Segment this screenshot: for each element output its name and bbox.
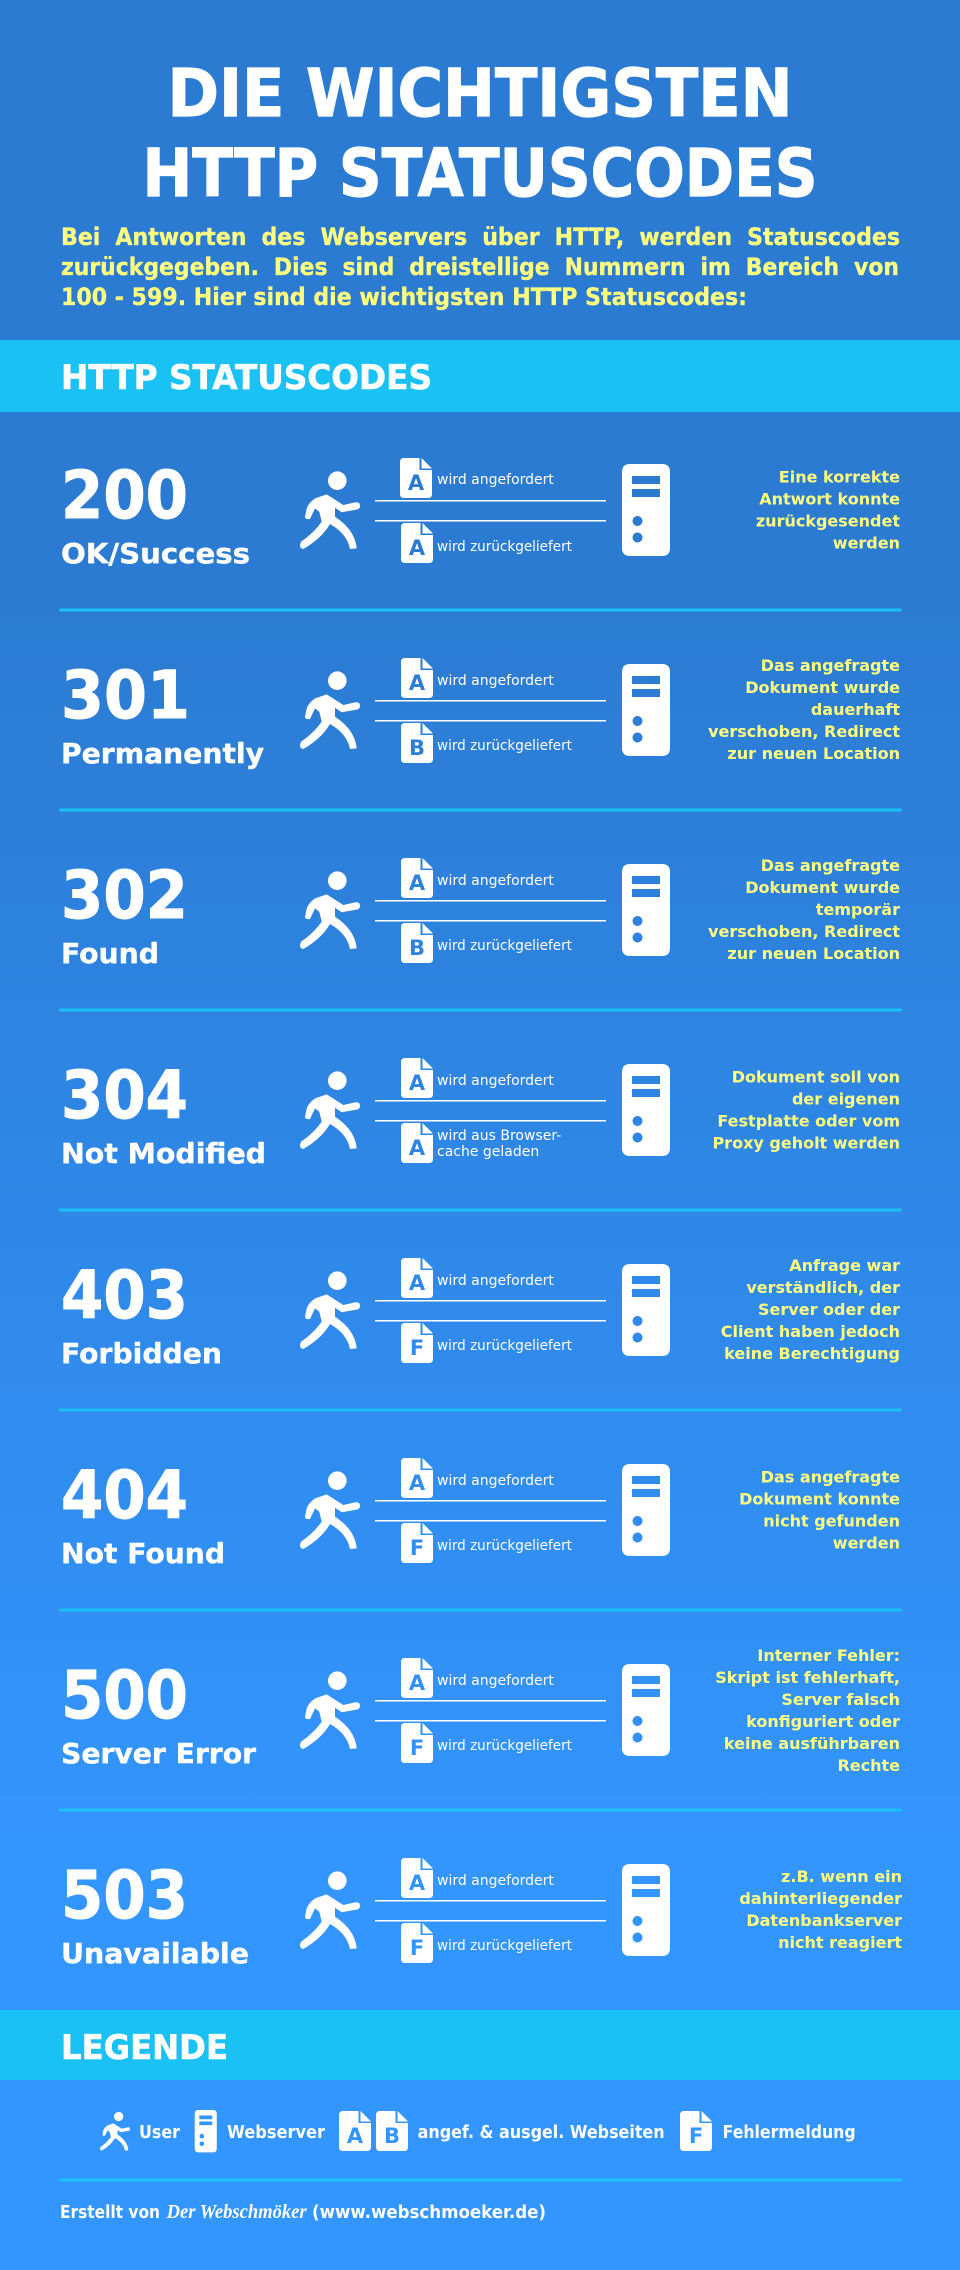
description: Das angefragte [761, 1468, 900, 1486]
request doc: A [409, 871, 426, 895]
description: Interner Fehler: [757, 1646, 900, 1665]
description [756, 468, 900, 552]
response doc [401, 923, 433, 963]
request doc [401, 658, 433, 698]
request doc [401, 1858, 433, 1898]
code number: 200 [61, 457, 188, 534]
status name: Unavailable [61, 1937, 249, 1970]
response label: cache geladen [437, 1144, 539, 1160]
icon: doc B: B [384, 2124, 400, 2148]
response label: wird zurückgeliefert [437, 1338, 572, 1354]
status row: 404 [61, 1457, 900, 1570]
response doc [401, 1923, 433, 1963]
status name: Forbidden [61, 1337, 222, 1370]
icon: user [300, 1071, 360, 1149]
description: zur neuen Location [727, 944, 900, 963]
request label: wird angefordert [437, 1673, 554, 1689]
code number: 304 [61, 1057, 188, 1134]
icon: server [622, 1064, 670, 1156]
legend label: webserver: Webserver [227, 2122, 325, 2143]
description: werden [833, 1534, 900, 1552]
description: der eigenen [792, 1090, 900, 1108]
legend label: user: User [139, 2122, 180, 2143]
response doc: F [410, 1336, 424, 1360]
icon: user [300, 1471, 360, 1549]
icon: user [300, 471, 360, 549]
status row: 302 [61, 856, 900, 970]
request doc [401, 1058, 433, 1098]
description: verschoben, Redirect [708, 922, 900, 941]
description: Anfrage war [789, 1256, 900, 1275]
status row: 503 [61, 1857, 902, 1970]
request label: wird angefordert [437, 1273, 554, 1289]
request doc [400, 458, 432, 498]
request label: wird angefordert [437, 472, 554, 488]
response doc: B [409, 736, 425, 760]
request label: wird angefordert [437, 1073, 554, 1089]
request line [375, 700, 606, 702]
request doc: A [409, 1271, 426, 1295]
description: Antwort konnte [759, 490, 900, 508]
description: Rechte [837, 1756, 900, 1775]
description: Das angefragte [761, 656, 900, 675]
description [708, 856, 900, 963]
description: Server oder der [758, 1300, 900, 1319]
section band: HTTP Statuscodes [0, 340, 960, 412]
section band: Legende: LEGENDE [61, 2028, 228, 2068]
response line [375, 1920, 606, 1922]
icon: server [622, 1264, 670, 1356]
response line [375, 520, 606, 522]
response line [375, 1320, 606, 1322]
legend [100, 2110, 856, 2152]
icon: user [300, 871, 360, 949]
credits: Erstellt von [60, 2202, 160, 2223]
description: Das angefragte [761, 856, 900, 875]
credits [60, 2201, 546, 2223]
icon: doc B [376, 2111, 408, 2151]
response label: wird zurückgeliefert [437, 1538, 572, 1554]
description: Proxy geholt werden [712, 1134, 900, 1152]
icon: doc A: A [347, 2124, 364, 2148]
description [708, 656, 900, 763]
request doc: A [409, 1671, 426, 1695]
description [712, 1068, 900, 1152]
icon: server [622, 664, 670, 756]
response label: wird aus Browser- [437, 1128, 561, 1144]
status row: 200 [61, 457, 900, 570]
intro text: 100 - 599. Hier sind die wichtigsten HTTP Statuscodes: [61, 283, 747, 311]
description: nicht reagiert [778, 1933, 902, 1952]
status name: OK/Success [61, 537, 250, 570]
intro text: zurückgegeben. Dies sind dreistellige Nummern im Bereich von [61, 253, 899, 281]
description: Festplatte oder vom [717, 1112, 900, 1130]
response doc: A [409, 1136, 426, 1160]
icon: server [622, 1664, 670, 1756]
response line [375, 1520, 606, 1522]
response doc [401, 523, 433, 563]
status name: Not Found [61, 1537, 225, 1570]
description: Dokument soll von [732, 1068, 900, 1086]
request line [375, 900, 606, 902]
response doc: F [410, 1536, 424, 1560]
response doc: F [410, 1736, 424, 1760]
response doc: A [409, 536, 426, 560]
icon: server [622, 464, 670, 556]
legend label: pages: angef. & ausgel. Webseiten [418, 2122, 665, 2143]
description: z.B. wenn ein [781, 1867, 902, 1886]
title: HTTP STATUSCODES [142, 135, 818, 212]
status row: 500 [61, 1646, 900, 1775]
icon: doc A [339, 2111, 371, 2151]
description [721, 1256, 900, 1363]
icon: server [622, 1864, 670, 1956]
description: Datenbankserver [746, 1911, 902, 1930]
description: Skript ist fehlerhaft, [715, 1668, 900, 1687]
description: dahinterliegender [739, 1889, 902, 1908]
response doc [401, 1323, 433, 1363]
request doc [401, 1258, 433, 1298]
icon: user [300, 1871, 360, 1949]
title [142, 55, 818, 212]
code number: 302 [61, 857, 188, 934]
response label: wird zurückgeliefert [437, 1938, 572, 1954]
status row: 304 [61, 1057, 900, 1170]
response line [375, 1120, 606, 1122]
request label: wird angefordert [437, 673, 554, 689]
description: konfiguriert oder [746, 1712, 900, 1731]
credits: (www.webschmoeker.de) [312, 2202, 546, 2223]
description: dauerhaft [811, 700, 900, 719]
response doc [401, 1123, 433, 1163]
description: keine Berechtigung [724, 1344, 900, 1363]
request doc: A [409, 1871, 426, 1895]
request label: wird angefordert [437, 873, 554, 889]
response doc [401, 1523, 433, 1563]
response label: wird zurückgeliefert [437, 539, 572, 555]
icon: user [300, 1671, 360, 1749]
description: verschoben, Redirect [708, 722, 900, 741]
request doc: A [409, 1471, 426, 1495]
intro text: Bei Antworten des Webservers über HTTP, werden Statuscodes [61, 223, 900, 251]
request line [375, 1500, 606, 1502]
status name: Found [61, 937, 159, 970]
description: verständlich, der [746, 1278, 900, 1297]
icon: user [100, 2112, 130, 2151]
icon: server [622, 1464, 670, 1556]
request label: wird angefordert [437, 1473, 554, 1489]
request doc: A [408, 471, 425, 495]
request doc: A [409, 1071, 426, 1095]
request doc [401, 1658, 433, 1698]
response line [375, 1720, 606, 1722]
icon: doc F [680, 2111, 712, 2151]
request doc: A [409, 671, 426, 695]
response line [375, 920, 606, 922]
status name: Permanently [61, 737, 264, 770]
code number: 500 [61, 1657, 188, 1734]
description: werden [833, 534, 900, 552]
icon: doc F: F [689, 2124, 703, 2148]
credits: Der Webschmöker [166, 2201, 307, 2223]
request line [375, 1300, 606, 1302]
section band: Legende [0, 2010, 960, 2080]
description: Dokument wurde [745, 678, 900, 697]
description [739, 1867, 902, 1952]
code number: 404 [61, 1457, 188, 1534]
icon: user [300, 671, 360, 749]
description: Dokument konnte [739, 1490, 900, 1508]
title: DIE WICHTIGSTEN [168, 55, 792, 132]
description: Dokument wurde [745, 878, 900, 897]
status name: Server Error [61, 1737, 256, 1770]
response doc [401, 723, 433, 763]
description [715, 1646, 900, 1775]
code number: 301 [61, 657, 190, 734]
description: Eine korrekte [779, 468, 900, 486]
response doc [401, 1723, 433, 1763]
response doc: F [410, 1936, 424, 1960]
legend label: error: Fehlermeldung [723, 2122, 856, 2143]
response label [437, 1128, 561, 1160]
intro text [61, 223, 900, 311]
status name: Not Modified [61, 1137, 266, 1170]
status row: 403 [61, 1256, 900, 1370]
code number: 503 [61, 1857, 188, 1934]
response label: wird zurückgeliefert [437, 938, 572, 954]
request label: wird angefordert [437, 1873, 554, 1889]
response doc: B [409, 936, 425, 960]
code number: 403 [61, 1257, 188, 1334]
icon: user [300, 1271, 360, 1349]
request doc [401, 1458, 433, 1498]
section band: HTTP Statuscodes: HTTP STATUSCODES [61, 358, 432, 398]
icon: server [195, 2110, 217, 2152]
description: zurückgesendet [756, 512, 900, 530]
request line [375, 1900, 606, 1902]
response label: wird zurückgeliefert [437, 1738, 572, 1754]
status row: 301 [61, 656, 900, 770]
response line [375, 720, 606, 722]
request line [375, 1700, 606, 1702]
response label: wird zurückgeliefert [437, 738, 572, 754]
icon: server [622, 864, 670, 956]
request line [375, 500, 606, 502]
description: zur neuen Location [727, 744, 900, 763]
description: temporär [816, 900, 900, 919]
description: Client haben jedoch [721, 1322, 900, 1341]
description [739, 1468, 900, 1552]
description: keine ausführbaren [724, 1734, 900, 1753]
description: nicht gefunden [763, 1512, 900, 1530]
description: Server falsch [781, 1690, 900, 1709]
request doc [401, 858, 433, 898]
request line [375, 1100, 606, 1102]
